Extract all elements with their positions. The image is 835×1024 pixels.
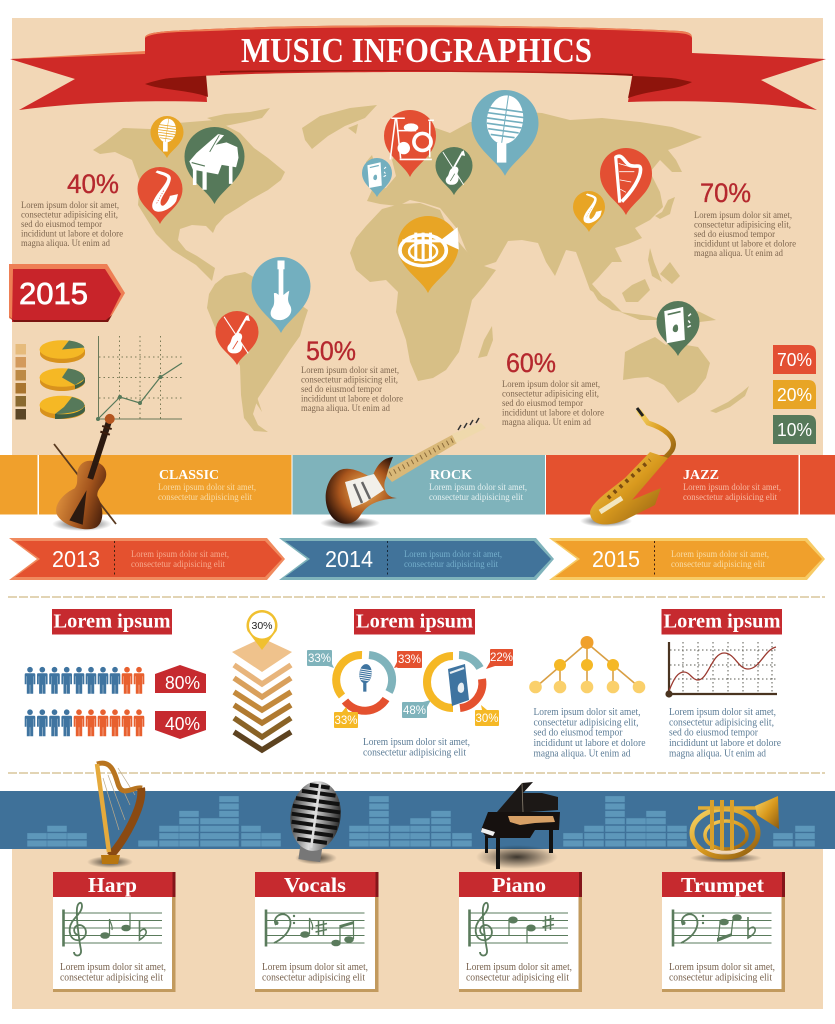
stat: 50% south america: consectetur adipisicing elit, (301, 376, 398, 386)
band: classic (0, 455, 292, 514)
stat: 60% indian ocean: magna aliqua. Ut enim ad (502, 418, 591, 428)
heading: lorem ipsum centre: Lorem ipsum (356, 612, 473, 632)
world map (93, 105, 749, 432)
pin: blue amplifier (362, 158, 392, 197)
tree caption: magna aliqua. Ut enim ad (534, 748, 631, 759)
card text: consectetur adipisicing elit (669, 972, 772, 984)
arrow 2015: consectetur adipisicing elit (671, 560, 765, 570)
stat: 70% asia: sed do eiusmod tempor (694, 230, 776, 240)
layered chevron stack (232, 610, 292, 750)
colour legend squares (16, 344, 26, 420)
arrow 2014: 2014 (325, 546, 373, 572)
stat: 40% north america: magna aliqua. Ut enim ad (21, 239, 110, 249)
stat: 70% asia: magna aliqua. Ut enim ad (694, 249, 783, 259)
card text (60, 962, 166, 984)
pin: red harp (600, 148, 652, 215)
card text (466, 962, 572, 984)
callout 30% yellow: 30% (475, 713, 499, 725)
stat: 50% south america: incididunt ut labore et dolore (301, 394, 403, 404)
stat: 60% indian ocean: 60% (506, 348, 556, 378)
card text: Lorem ipsum dolor sit amet, (669, 962, 775, 973)
band: rock: Lorem ipsum dolor sit amet, (429, 483, 527, 493)
instrument: saxophone (580, 408, 673, 527)
stat: 50% south america: magna aliqua. Ut enim ad (301, 404, 390, 414)
stat: 60% indian ocean: incididunt ut labore et dolore (502, 408, 604, 418)
card text (262, 962, 368, 984)
pin: blue microphone (472, 90, 538, 176)
card: trumpet: Trumpet (681, 873, 764, 897)
chart caption: sed do eiusmod tempor (669, 728, 758, 739)
tree caption: Lorem ipsum dolor sit amet, (534, 707, 640, 718)
pin: yellow microphone (150, 116, 184, 158)
pie 3 (40, 396, 85, 419)
stat: 70% asia (694, 178, 796, 259)
badge 40%: 40% (165, 714, 200, 734)
badge 70%: 70% (777, 349, 812, 370)
pin: red violin (216, 311, 258, 365)
card: vocals: Vocals (284, 873, 346, 897)
tree diagram (529, 636, 645, 693)
title ribbon (10, 25, 826, 110)
arrow 2014 (279, 538, 554, 580)
stat: 40% north america (21, 169, 123, 249)
card text: consectetur adipisicing elit (60, 972, 163, 984)
chart caption: magna aliqua. Ut enim ad (669, 748, 767, 759)
tree caption: incididunt ut labore et dolore (534, 738, 646, 749)
stat: 40% north america: consectetur adipisicing elit, (21, 210, 118, 220)
instrument: microphone (285, 778, 345, 864)
donut caption: Lorem ipsum dolor sit amet, (363, 737, 470, 748)
stat: 40% north america: incididunt ut labore et dolore (21, 230, 123, 240)
pin: green violin (436, 147, 472, 195)
pin 30%: 30% (251, 620, 273, 632)
blue equalizer band (0, 791, 835, 849)
pin: yellow trumpet (398, 216, 458, 293)
stat: 50% south america: Lorem ipsum dolor sit amet, (301, 366, 399, 376)
arrow 2013: consectetur adipisicing elit (131, 560, 225, 570)
card: trumpet (662, 872, 785, 992)
stat: 40% north america: sed do eiusmod tempor (21, 220, 103, 230)
band: classic: CLASSIC (159, 468, 219, 483)
arrow 2013 (9, 538, 285, 580)
arrow 2013: Lorem ipsum dolor sit amet, (131, 550, 229, 560)
band: rock (292, 455, 545, 514)
instrument: electric guitar (320, 418, 486, 529)
stat: 60% indian ocean: consectetur adipisicing elit, (502, 390, 599, 400)
people pictogram row 40% (25, 709, 206, 739)
heading: lorem ipsum left: Lorem ipsum (54, 612, 170, 632)
card text (669, 962, 775, 984)
card text: Lorem ipsum dolor sit amet, (60, 962, 166, 973)
badge 40% (155, 711, 206, 739)
band: jazz: consectetur adipisicing elit (683, 493, 777, 503)
arrow 2015 (549, 538, 825, 580)
title text: MUSIC INFOGRAPHICS (241, 31, 592, 70)
line chart (96, 336, 182, 421)
instrument: harp (87, 763, 142, 868)
badge 80% (155, 665, 206, 693)
stat: 50% south america (301, 336, 403, 414)
donut chart: amplifier (427, 649, 513, 726)
donut icon: amplifier (448, 664, 469, 706)
stat: 70% asia: incididunt ut labore et dolore (694, 240, 796, 250)
pin: green amplifier (656, 301, 700, 356)
instrument: grand piano (476, 782, 560, 869)
timeline (9, 538, 825, 580)
card: piano (459, 872, 582, 992)
pin: yellow saxophone (573, 191, 605, 232)
badge 10%: 10% (777, 419, 812, 440)
donut icon: microphone (358, 663, 373, 692)
callout 48% blue: 48% (403, 705, 426, 717)
staff notation (266, 910, 364, 946)
arrow 2014: Lorem ipsum dolor sit amet, (404, 550, 502, 560)
people pictogram row 80% (25, 665, 206, 694)
band: jazz: Lorem ipsum dolor sit amet, (683, 483, 781, 493)
heading: lorem ipsum right: Lorem ipsum (664, 612, 780, 632)
stat: 70% asia: Lorem ipsum dolor sit amet, (694, 211, 792, 221)
pie 2 (40, 368, 85, 391)
staff notation (672, 910, 772, 946)
stat: 40% north america: 40% (67, 169, 119, 199)
stat: 50% south america: 50% (306, 336, 356, 366)
pin: green piano (184, 127, 244, 204)
donut caption (363, 737, 470, 758)
chart caption: Lorem ipsum dolor sit amet, (669, 707, 776, 718)
3D pie charts (40, 340, 85, 419)
band: classic: consectetur adipisicing elit (158, 493, 252, 503)
stat: 40% north america: Lorem ipsum dolor sit amet, (21, 201, 119, 211)
panel: top map background (12, 18, 823, 455)
legend badges 70 20 10 (773, 345, 816, 444)
year tag 2015: 2015 (19, 276, 88, 311)
arrow 2014: consectetur adipisicing elit (404, 560, 498, 570)
arrow 2015: Lorem ipsum dolor sit amet, (671, 550, 769, 560)
callout 33% yellow: 33% (334, 715, 358, 727)
card text: consectetur adipisicing elit (466, 972, 569, 984)
stat: 60% indian ocean (502, 348, 604, 428)
staff notation (63, 903, 162, 956)
tree caption: sed do eiusmod tempor (534, 728, 623, 739)
chart caption: consectetur adipisicing elit, (669, 717, 774, 728)
donut chart: microphone (307, 650, 431, 728)
card text: consectetur adipisicing elit (262, 972, 365, 984)
stat: 70% asia: consectetur adipisicing elit, (694, 220, 791, 230)
arrow 2013: 2013 (52, 546, 100, 572)
card: vocals (255, 872, 378, 992)
stat: 60% indian ocean: Lorem ipsum dolor sit amet, (502, 380, 600, 390)
stat: 50% south america: sed do eiusmod tempor (301, 385, 383, 395)
instrument: trumpet (690, 796, 779, 863)
tree caption: consectetur adipisicing elit, (534, 717, 638, 728)
chart caption (669, 707, 781, 759)
instrument: violin (52, 407, 134, 534)
band: classic: Lorem ipsum dolor sit amet, (158, 483, 256, 493)
callout 33% red: 33% (398, 654, 421, 666)
pie 1 (40, 340, 85, 363)
card text: Lorem ipsum dolor sit amet, (466, 962, 572, 973)
badge 20%: 20% (777, 384, 812, 405)
staff notation (469, 903, 568, 956)
card text: Lorem ipsum dolor sit amet, (262, 962, 368, 973)
callout 33% blue: 33% (308, 653, 331, 665)
panel: lower beige background (12, 849, 823, 1009)
card: harp: Harp (88, 873, 137, 897)
curve chart (665, 642, 777, 698)
chart caption: incididunt ut labore et dolore (669, 738, 781, 749)
band: rock: consectetur adipisicing elit (429, 493, 523, 503)
donut caption: consectetur adipisicing elit (363, 748, 466, 758)
year tag 2015 (9, 264, 125, 322)
band: jazz: JAZZ (683, 468, 719, 483)
pin: red saxophone (138, 167, 182, 224)
stat: 70% asia: 70% (700, 178, 751, 208)
arrow 2015: 2015 (592, 546, 640, 572)
band: jazz (546, 455, 835, 514)
band: rock: ROCK (430, 468, 472, 483)
card: piano: Piano (492, 873, 546, 897)
pin: blue guitar (252, 257, 310, 333)
callout 22% red: 22% (490, 652, 513, 664)
map pins (138, 90, 700, 365)
pin: red drums (384, 110, 436, 177)
badge 80%: 80% (165, 673, 200, 693)
stat: 60% indian ocean: sed do eiusmod tempor (502, 399, 584, 409)
genre band (0, 455, 835, 514)
tree caption (534, 707, 646, 759)
card: harp (53, 872, 176, 992)
